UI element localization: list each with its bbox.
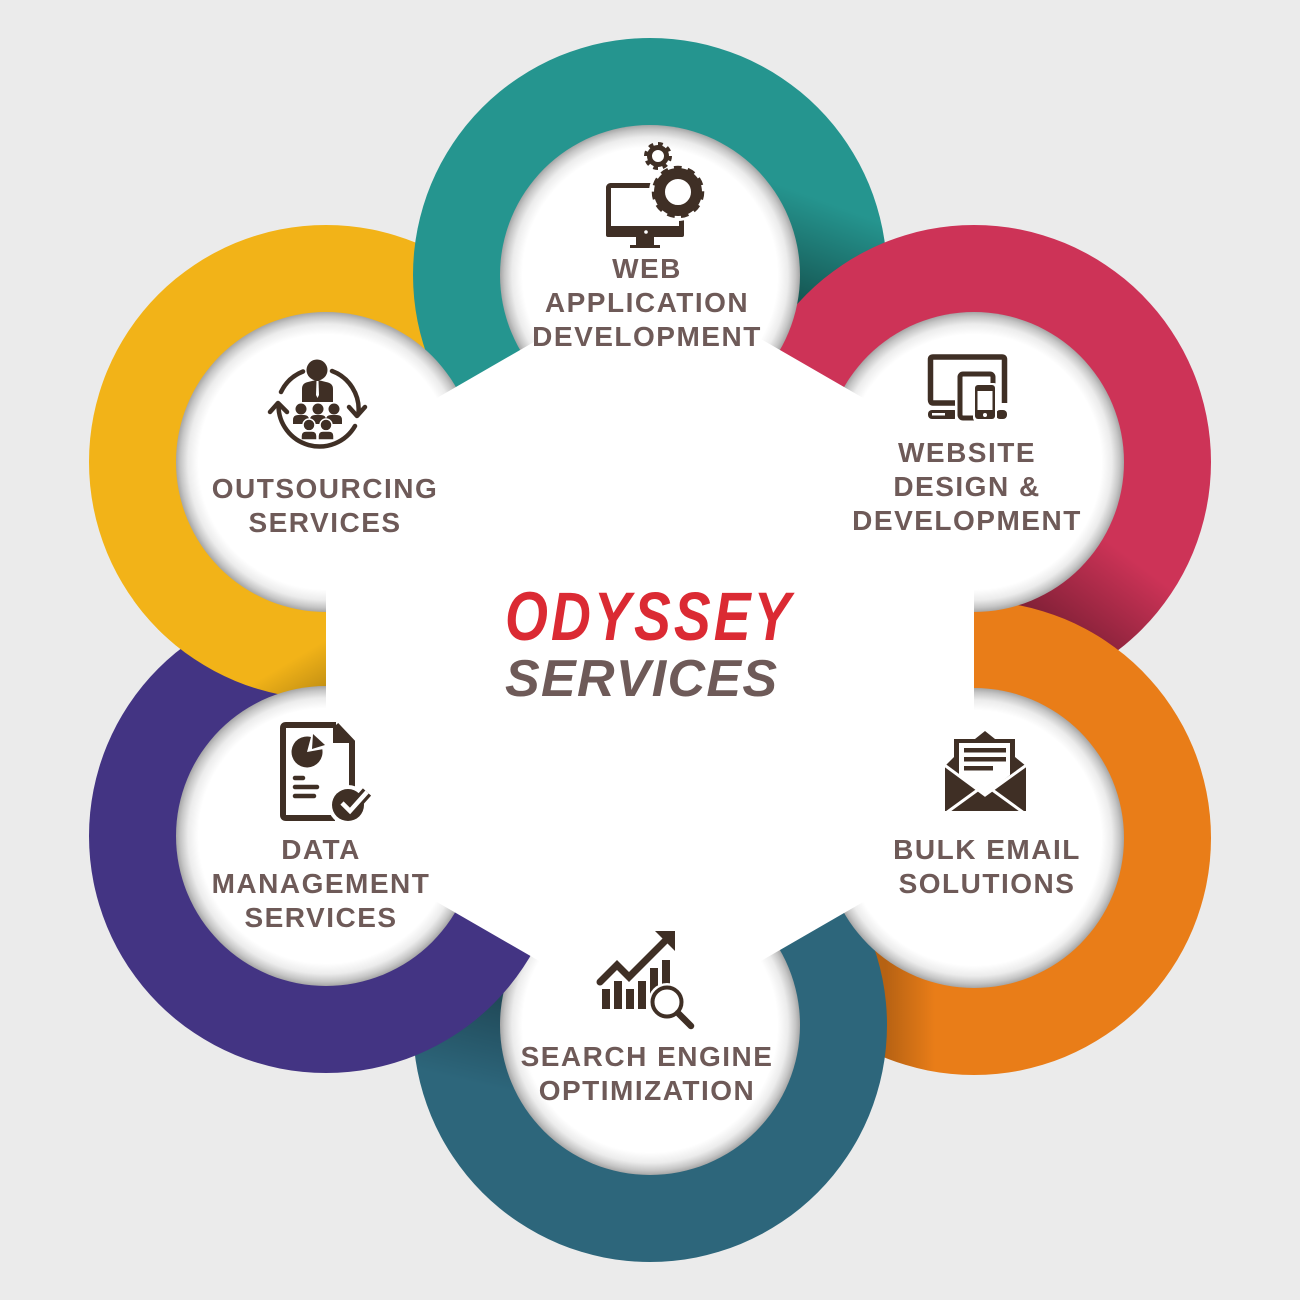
- label: web application development: APPLICATION: [545, 287, 749, 318]
- panel: website design and development: [852, 357, 1082, 536]
- label: website design and development: DEVELOPMENT: [852, 505, 1082, 536]
- ring: bulk email orange: [874, 605, 1211, 1075]
- inner circle: website design: [824, 312, 1124, 612]
- ring: outsourcing yellow: [89, 225, 563, 699]
- ring: data management purple: [89, 599, 563, 1073]
- icon: document with pie chart and check: [283, 723, 368, 825]
- label: outsourcing services: SERVICES: [248, 507, 402, 538]
- panel: search engine optimization: [521, 931, 773, 1106]
- label: data management services: DATA: [281, 834, 361, 865]
- label: web application development: DEVELOPMENT: [532, 321, 762, 352]
- inner circle: bulk email: [824, 688, 1124, 988]
- panel: outsourcing services: [212, 360, 438, 538]
- label: outsourcing services: OUTSOURCING: [212, 473, 438, 504]
- inner circle: search engine: [500, 875, 800, 1175]
- label: bulk email solutions: SOLUTIONS: [899, 868, 1075, 899]
- panel: data management services: [212, 723, 430, 933]
- title: [505, 578, 795, 708]
- label: website design and development: DESIGN &: [893, 471, 1041, 502]
- title: services: SERVICES: [505, 650, 778, 708]
- label: search engine optimization: OPTIMIZATION: [539, 1075, 755, 1106]
- label: website design and development: WEBSITE: [898, 437, 1036, 468]
- label: data management services: SERVICES: [244, 902, 398, 933]
- ring: yellow overlap above purple: [133, 600, 326, 694]
- ring: search engine dark teal: [415, 913, 887, 1262]
- icon: manager and team with circular arrows: [270, 360, 365, 446]
- title: odyssey: ODYSSEY: [505, 578, 795, 655]
- label: search engine optimization: SEARCH ENGINE: [521, 1041, 773, 1072]
- panel: web application development: [532, 144, 762, 352]
- central white hexagon: [326, 275, 974, 1025]
- ring: web application teal: [413, 38, 885, 387]
- label: web application development: WEB: [612, 253, 682, 284]
- inner circle: web application: [500, 125, 800, 425]
- icon: growth chart with magnifier: [600, 931, 691, 1026]
- inner circle: data management: [176, 686, 476, 986]
- icon: monitor with gears: [606, 144, 707, 248]
- panel: bulk email solutions: [893, 731, 1081, 899]
- inner circle: outsourcing: [176, 312, 476, 612]
- icon: monitor tablet phone: [928, 357, 1007, 421]
- label: data management services: MANAGEMENT: [212, 868, 430, 899]
- icon: open envelope: [943, 731, 1028, 813]
- label: bulk email solutions: BULK EMAIL: [893, 834, 1081, 865]
- ring: website design crimson: [780, 225, 1211, 650]
